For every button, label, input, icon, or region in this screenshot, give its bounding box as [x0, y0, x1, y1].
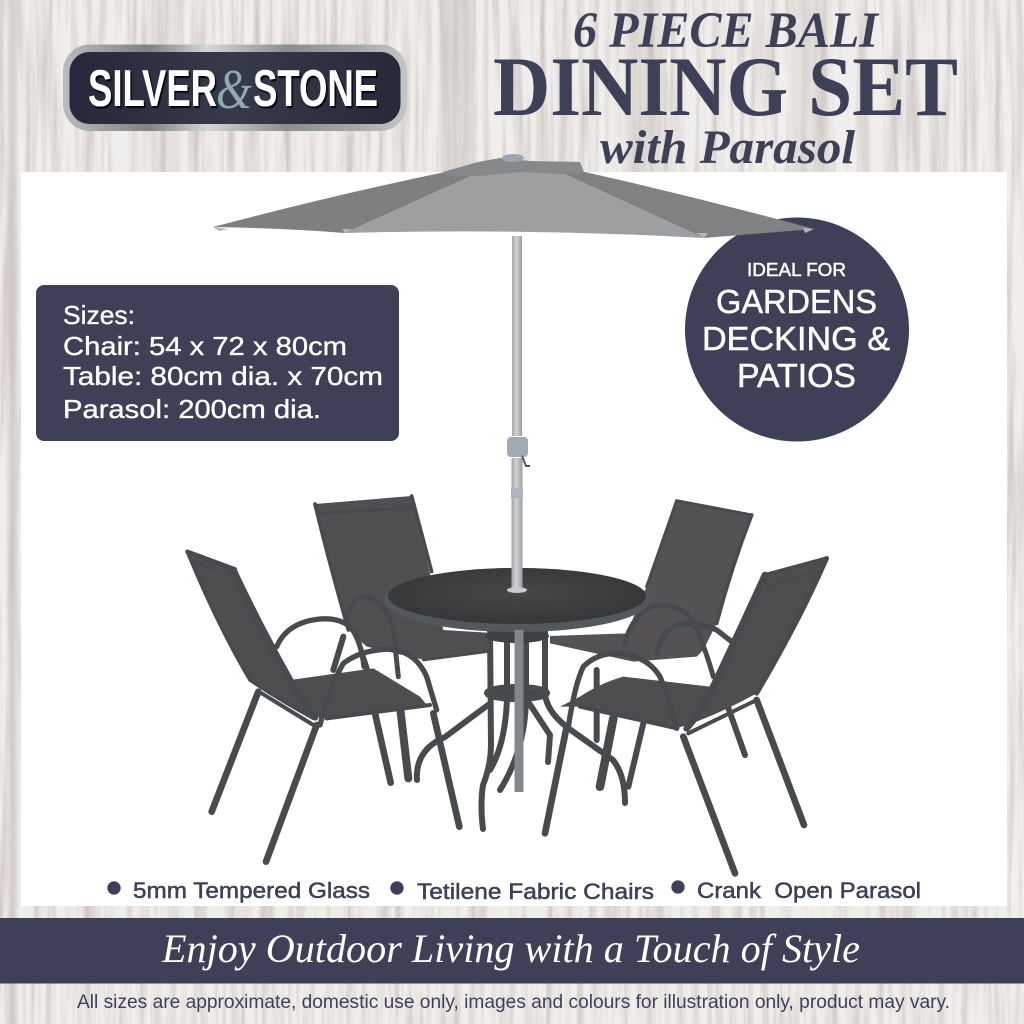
chair: rear left [315, 496, 488, 778]
chair: rear right [550, 501, 752, 787]
title [493, 3, 958, 174]
feature list [108, 878, 921, 904]
sizes panel: Chair: 54 x 72 x 80cm [63, 331, 347, 361]
slogan band: Enjoy Outdoor Living with a Touch of Style [161, 926, 860, 971]
slogan band [0, 918, 1024, 984]
feature list: 5mm Tempered Glass [133, 878, 370, 903]
callout: ideal for: GARDENS [716, 283, 877, 320]
sizes panel [36, 285, 399, 441]
chair: front left [187, 552, 459, 862]
chair: front right [545, 557, 828, 873]
title: with Parasol [600, 121, 856, 174]
callout: ideal for: DECKING & [702, 320, 890, 357]
disclaimer: All sizes are approximate, domestic use only, images and colours for illustration only, product may vary. [77, 992, 950, 1013]
sizes panel: Table: 80cm dia. x 70cm [63, 361, 383, 391]
feature list: Tetilene Fabric Chairs [417, 879, 654, 904]
white product panel [21, 172, 1007, 906]
parasol canopy [213, 154, 814, 238]
title: DINING SET [493, 40, 958, 134]
logo: Silver & Stone: & [216, 59, 252, 121]
callout: ideal for [685, 218, 909, 442]
callout: ideal for: IDEAL FOR [747, 260, 846, 280]
sizes panel: Parasol: 200cm dia. [63, 394, 321, 424]
sizes panel: Sizes: [63, 300, 135, 330]
table legs and shelf [417, 628, 625, 829]
table [384, 568, 650, 829]
feature list: Crank Open Parasol [697, 878, 921, 903]
callout: ideal for: PATIOS [737, 357, 856, 394]
logo: Silver & Stone: STONE [253, 60, 378, 118]
logo: Silver & Stone [63, 44, 407, 131]
title: 6 PIECE BALI [573, 3, 880, 59]
logo: Silver & Stone: SILVER [88, 60, 217, 118]
parasol pole and crank [507, 236, 530, 792]
